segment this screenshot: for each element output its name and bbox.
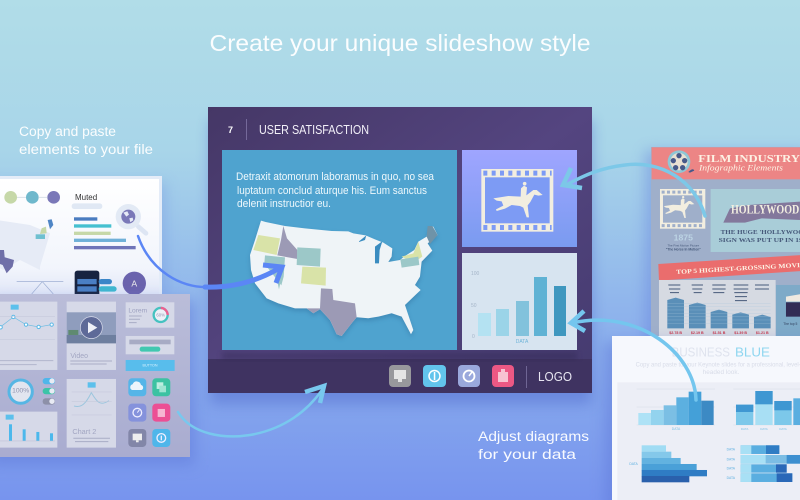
donut card: [126, 302, 174, 328]
title: Create your unique slideshow style: [210, 30, 590, 56]
body text: [236, 171, 435, 210]
red ribbon: TOP 5 HIGHEST-GROSSING MOVIES: [676, 262, 800, 276]
donut card: Lorem: [128, 307, 148, 314]
horizontal bars: [72, 203, 136, 249]
button: BUTTON: [143, 364, 158, 368]
movies stacks: $1.51 B: [713, 331, 726, 335]
caption: adjust diagrams: Adjust diagrams: [478, 429, 589, 444]
stacked horizontal bars: DATA: [727, 466, 736, 470]
icon: film strip with horse: [481, 169, 553, 232]
panel: central slide: [208, 107, 592, 404]
horizontal step chart: [629, 445, 707, 482]
bar chart card: [0, 412, 57, 448]
hollywood card: [711, 189, 800, 252]
panel: film industry infographic: [645, 147, 800, 350]
bar chart panel: 50: [471, 303, 477, 309]
great lakes: [359, 235, 382, 263]
small film strip: The First Motion Picture: [667, 244, 699, 248]
film panel: [462, 150, 577, 247]
stacked horizontal bars: [727, 445, 800, 482]
horizontal step chart: DATA: [629, 462, 638, 466]
movies stacks: $1.21 B: [756, 331, 769, 335]
stacked horizontal bars: DATA: [727, 448, 736, 452]
icon: magnifier with globe: [116, 204, 146, 233]
stacked column chart: DATA: [760, 427, 768, 431]
phone mockup: [75, 271, 117, 297]
red ribbon: [658, 255, 800, 281]
usa map pale: [0, 220, 50, 270]
movies stacks: $2.19 B: [691, 331, 704, 335]
search card: [126, 336, 174, 354]
panel: business blue charts sheet: [605, 336, 800, 500]
arrow: UI kit to slide: [178, 386, 324, 436]
heading: Muted: Muted: [75, 193, 97, 202]
film banner: [652, 147, 800, 179]
progress gauge and toggles: [9, 378, 55, 405]
bar chart panel: 100: [471, 271, 480, 277]
avatar circle A: A: [131, 279, 137, 289]
button: [126, 360, 175, 371]
clapper card: [776, 285, 800, 338]
video card: [67, 302, 116, 370]
line chart card: [0, 302, 57, 370]
body text: luptatum conclud aturque his. Eum sanctus: [237, 185, 427, 197]
clapper card: The top 5: [783, 322, 798, 326]
caption: copy and paste: elements to your file: [19, 142, 153, 157]
small film strip: [660, 189, 705, 252]
main blue panel: [222, 150, 457, 350]
small film strip: 1875: [674, 233, 693, 243]
heading: business blue: [636, 346, 800, 376]
stacked horizontal bars: DATA: [727, 476, 736, 480]
heading: business blue: headed look.: [703, 369, 740, 376]
caption: adjust diagrams: [478, 429, 589, 462]
logo text: LOGO: [538, 369, 572, 384]
stacked column chart: DATA: [779, 427, 787, 431]
progress gauge and toggles: 100%: [12, 387, 29, 394]
panel: white map and bars sheet: [0, 176, 166, 306]
movies stacks: $2.78 B: [669, 331, 682, 335]
hollywood card: SIGN WAS PUT UP IN 1923: [719, 237, 800, 244]
caption: copy and paste: [19, 124, 153, 157]
heading: business blue: BUSINESS: [672, 346, 730, 360]
stepped bar chart: [637, 389, 800, 431]
avatar circle A: [123, 272, 146, 295]
stacked horizontal bars: DATA: [727, 457, 736, 461]
toolbar icons: [389, 365, 514, 387]
chart backdrop: [617, 382, 800, 500]
arrow: map to slide: [138, 236, 282, 287]
bar chart panel: 0: [472, 334, 475, 340]
body text: delenit instructior eu.: [237, 198, 331, 210]
hollywood card: THE HUGE 'HOLLYWOOD': [721, 229, 800, 236]
stacked column chart: [736, 391, 800, 431]
heading: business blue: BLUE: [735, 346, 770, 360]
usa map: [250, 221, 438, 339]
sparkline: [17, 282, 63, 294]
arrow: business sheet to chart panel: [571, 311, 696, 400]
color circles: [4, 191, 60, 204]
arrow: film sheet to film panel: [563, 164, 705, 216]
caption: copy and paste: Copy and paste: [19, 124, 116, 139]
icon tiles: [128, 378, 170, 447]
chart 2 card: Chart 2: [72, 427, 96, 436]
movies stacks: [659, 280, 776, 338]
stepped bar chart: DATA: [672, 427, 681, 431]
bar chart panel: DATA: [516, 339, 529, 345]
caption: adjust diagrams: for your data: [478, 447, 577, 462]
highlighted states: [253, 226, 438, 336]
map highlights: [0, 219, 53, 273]
donut card: 60%: [156, 313, 165, 318]
slide heading: USER SATISFACTION: [259, 123, 369, 137]
bar chart panel: [462, 253, 577, 350]
film banner: FILM INDUSTRY: [698, 154, 800, 165]
small film strip: "The Horse In Motion": [666, 248, 701, 252]
panel: lilac UI kit sheet: [0, 294, 195, 465]
slide number: 7: [228, 125, 233, 135]
video card: Video: [70, 353, 88, 360]
stacked column chart: DATA: [741, 427, 748, 431]
film banner: Infographic Elements: [698, 164, 783, 173]
chart 2 card: [67, 379, 116, 448]
slide footer bar: [208, 359, 592, 393]
body text: Detraxit atomorum laboramus in quo, no sea: [236, 171, 435, 183]
movies stacks: $1.39 B: [734, 331, 747, 335]
